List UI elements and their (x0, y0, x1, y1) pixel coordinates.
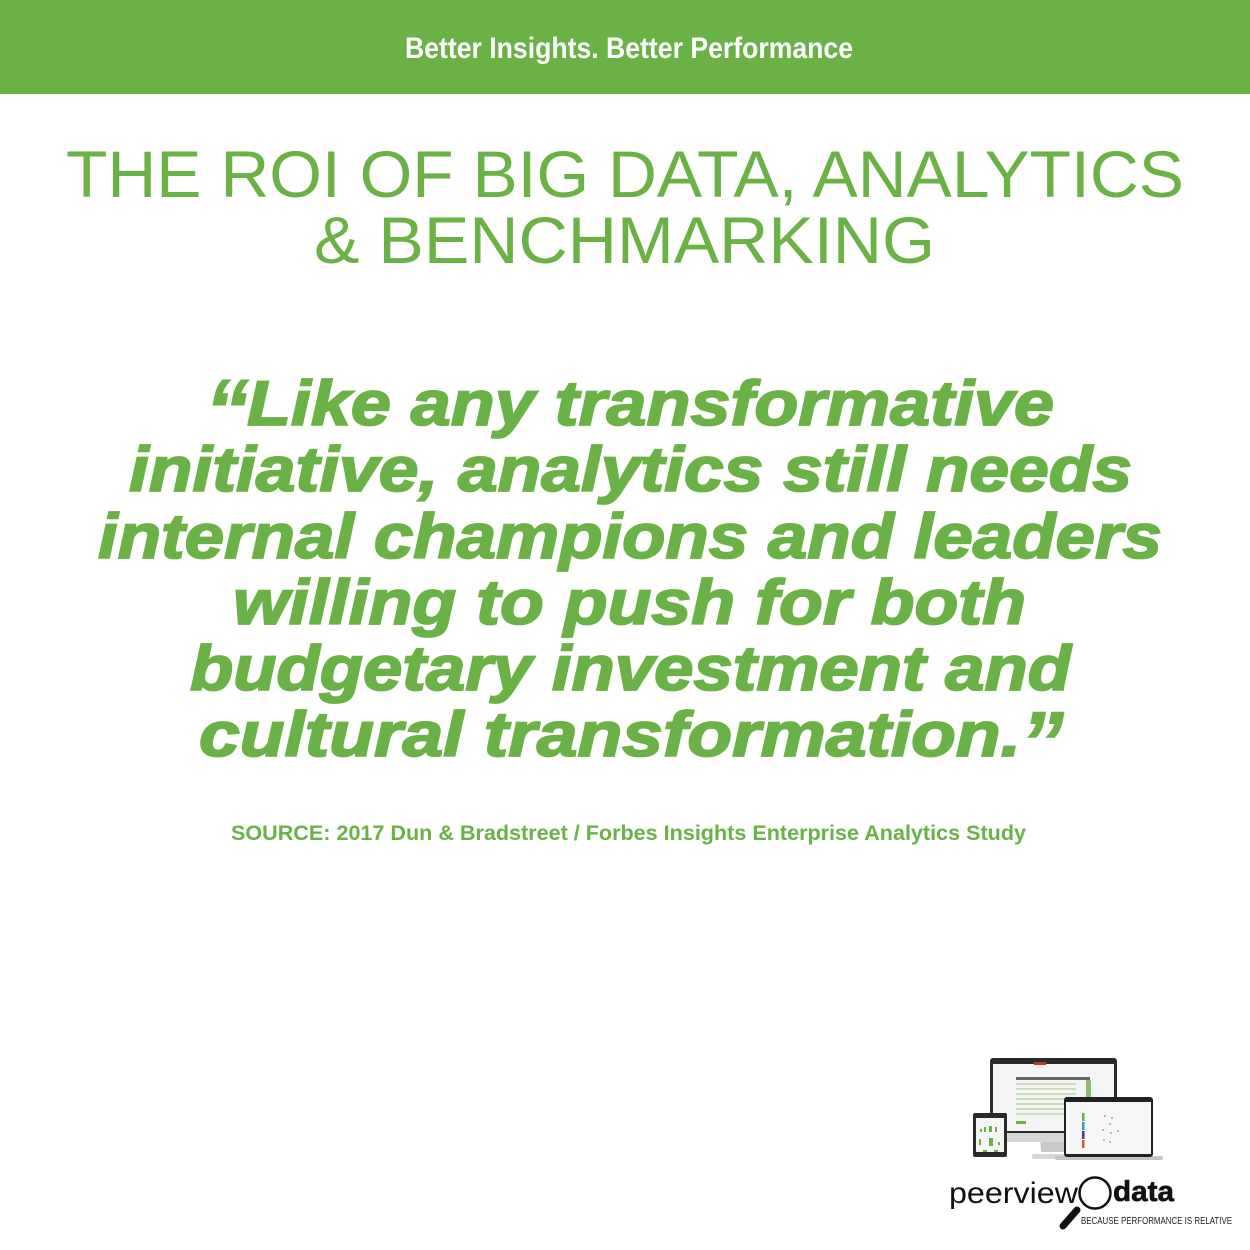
logo: peerview data: peerview (949, 1177, 1078, 1210)
quote: “ (205, 361, 249, 460)
icon: magnifying glass (1063, 1178, 1110, 1226)
quote: budgetary investment and (190, 634, 1073, 704)
title: & BENCHMARKING (314, 203, 935, 277)
source note: SOURCE: 2017 Dun & Bradstreet / Forbes Insights Enterprise Analytics Study (231, 822, 1026, 845)
icon: laptop (1055, 1097, 1163, 1160)
icon: desktop monitor (990, 1058, 1117, 1159)
title: THE ROI OF BIG DATA, ANALYTICS (66, 137, 1184, 211)
header banner (0, 0, 1250, 94)
quote: Like any transformative (247, 369, 1054, 439)
quote: internal champions and leaders (98, 502, 1162, 572)
title (66, 137, 1184, 277)
header banner: Better Insights. Better Performance (405, 32, 853, 65)
quote: willing to push for both (233, 568, 1026, 638)
quote (98, 361, 1162, 792)
logo: peerview data: data (1113, 1176, 1175, 1208)
quote: cultural transformation. (199, 700, 1021, 770)
icon: tablet (973, 1113, 1007, 1157)
quote: initiative, analytics still needs (129, 435, 1132, 505)
device mockups (973, 1058, 1163, 1160)
quote: ” (1020, 693, 1064, 792)
logo: peerview data (949, 1176, 1232, 1227)
